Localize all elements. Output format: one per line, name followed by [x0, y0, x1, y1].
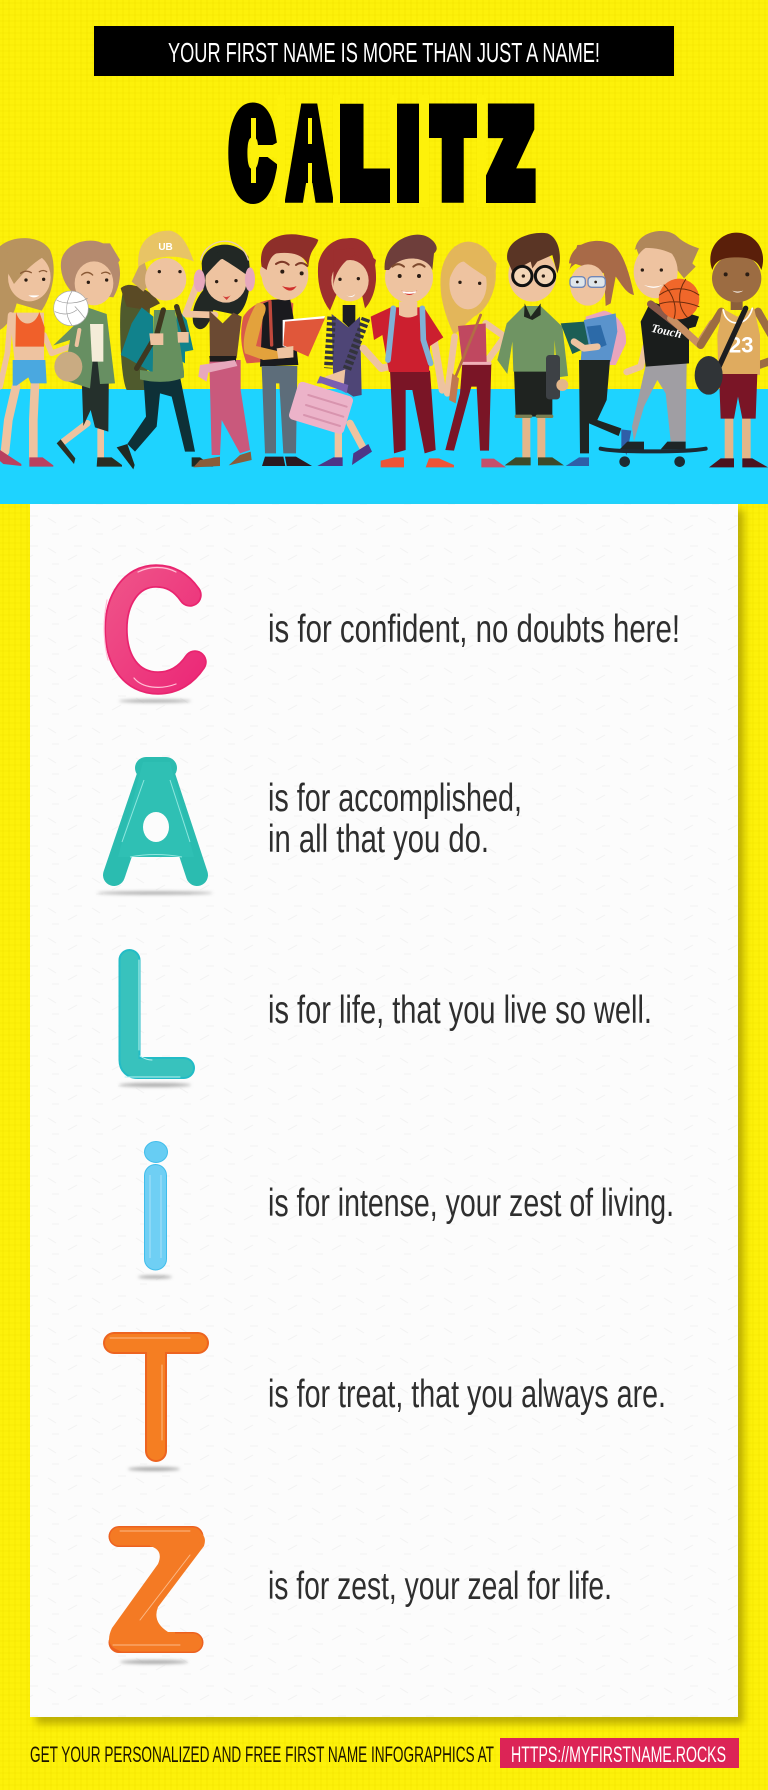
text: A lines: in all that you do. — [268, 818, 489, 861]
icon: letter Z — [109, 1530, 205, 1650]
person: girl with ponytail and tablet — [561, 241, 634, 466]
title: CALITZ: L — [341, 91, 386, 216]
text: A lines: is for accomplished, — [268, 777, 522, 820]
title: CALITZ: T — [433, 91, 472, 216]
title: CALITZ: I — [397, 91, 419, 216]
letter T shadow — [128, 1467, 180, 1471]
text: Z line: is for zest, your zeal for life. — [268, 1565, 612, 1608]
person: blonde girl — [440, 242, 506, 467]
crowd floor: blue band — [0, 389, 768, 504]
title: CALITZ: Z — [490, 91, 531, 216]
top banner — [94, 26, 674, 76]
row: letter L — [119, 960, 652, 1087]
row: letter T — [110, 1338, 666, 1471]
icon: letter I — [144, 1142, 168, 1270]
row: letter Z — [109, 1530, 612, 1664]
person: skateboarder with basketball — [601, 231, 712, 467]
letter Z shadow — [120, 1660, 188, 1664]
person: skateboarder with basketball: Touch — [650, 321, 683, 341]
person: boy reading a book — [241, 234, 325, 466]
text: A lines — [268, 777, 522, 861]
row: letter A — [97, 762, 522, 895]
person: boy with cap and backpack: UB — [158, 242, 173, 253]
person: girl with volleyball — [53, 241, 122, 467]
title: CALITZ: C — [232, 91, 272, 216]
person: girl with pink headphones — [186, 241, 255, 467]
icon: letter C — [104, 568, 195, 687]
icon: letter T — [110, 1338, 198, 1451]
person: boy in yellow jersey with shoulder bag — [695, 233, 768, 467]
person: boy in yellow jersey with shoulder bag: 23 — [729, 333, 753, 358]
white panel — [30, 504, 738, 1717]
person: girl in orange top — [0, 238, 77, 467]
people right half — [363, 231, 768, 467]
footer call to action: GET YOUR PERSONALIZED AND FREE FIRST NAME INFOGRAPHICS AT — [30, 1742, 494, 1767]
person: boy with cap and backpack — [117, 231, 213, 469]
title: CALITZ — [232, 91, 531, 216]
row: letter I — [138, 1142, 674, 1279]
person: boy with glasses — [497, 233, 568, 465]
person: girl in purple with pink bag — [288, 238, 376, 466]
letter A shadow — [97, 891, 213, 895]
illustration: group of young people — [0, 231, 768, 469]
people left half — [0, 231, 376, 469]
letter I shadow — [138, 1275, 172, 1279]
row: letter C — [104, 568, 680, 703]
person: boy in red shirt — [363, 235, 454, 467]
letter C shadow — [119, 699, 191, 703]
icon: letter L — [125, 960, 184, 1077]
title: CALITZ: A — [290, 91, 328, 216]
icon: letter A — [114, 762, 197, 875]
panel shadow — [36, 510, 744, 1724]
letter L shadow — [119, 1083, 191, 1087]
